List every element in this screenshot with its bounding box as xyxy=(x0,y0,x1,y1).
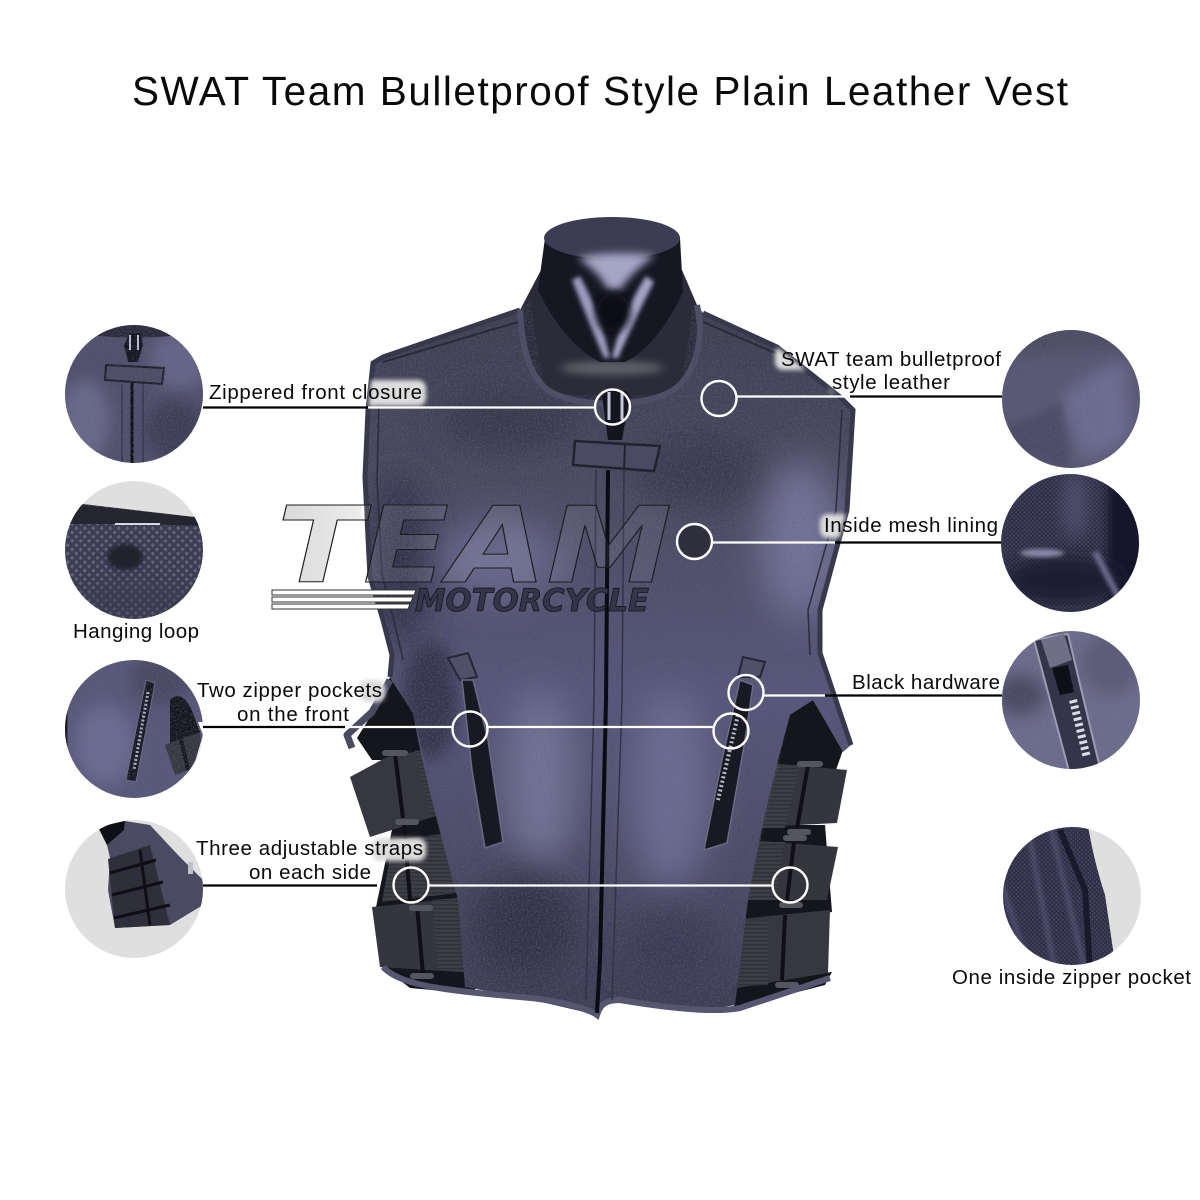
inner collar lining xyxy=(520,270,700,404)
labels: on the front xyxy=(237,703,349,726)
detail circle: two zipper pockets xyxy=(65,660,203,798)
detail circle: inside zipper pocket xyxy=(1003,827,1141,965)
left pocket xyxy=(448,653,503,848)
labels: Hanging loop xyxy=(73,620,199,643)
labels: Three adjustable straps xyxy=(196,837,423,860)
text halos on vest xyxy=(358,346,848,864)
detail circle: zippered front closure xyxy=(65,325,203,463)
mannequin neck xyxy=(538,217,683,362)
labels: One inside zipper pocket xyxy=(952,966,1191,989)
detail circle: inside mesh lining xyxy=(1001,474,1139,612)
labels: on each side xyxy=(249,861,371,884)
seams and bindings xyxy=(365,310,520,677)
title: SWAT Team Bulletproof Style Plain Leather Vest xyxy=(132,68,1068,114)
zipper front with tab xyxy=(573,391,660,1013)
right straps xyxy=(725,763,847,990)
labels: Inside mesh lining xyxy=(824,514,998,537)
right pocket xyxy=(704,657,765,850)
labels: style leather xyxy=(832,371,950,394)
dark side mesh and back straps xyxy=(357,677,843,1008)
detail circle: black hardware xyxy=(1002,631,1140,769)
labels: SWAT team bulletproof xyxy=(781,348,1001,371)
watermark logo: TEAM xyxy=(277,485,672,607)
leather body xyxy=(340,290,860,1020)
detail circle: hanging loop xyxy=(65,481,203,619)
detail circle: bulletproof style leather xyxy=(1002,330,1140,468)
labels: Zippered front closure xyxy=(209,381,422,404)
labels xyxy=(73,348,1191,989)
detail circle: three adjustable straps xyxy=(65,820,203,958)
mesh marker detail xyxy=(678,526,710,558)
leader lines xyxy=(203,396,1002,886)
labels: Black hardware xyxy=(852,671,1000,694)
left straps xyxy=(350,750,475,976)
watermark logo: MOTORCYCLE xyxy=(415,583,649,619)
labels: Two zipper pockets xyxy=(197,679,382,702)
callout markers xyxy=(394,381,808,902)
vest photo illustration xyxy=(272,217,860,1020)
